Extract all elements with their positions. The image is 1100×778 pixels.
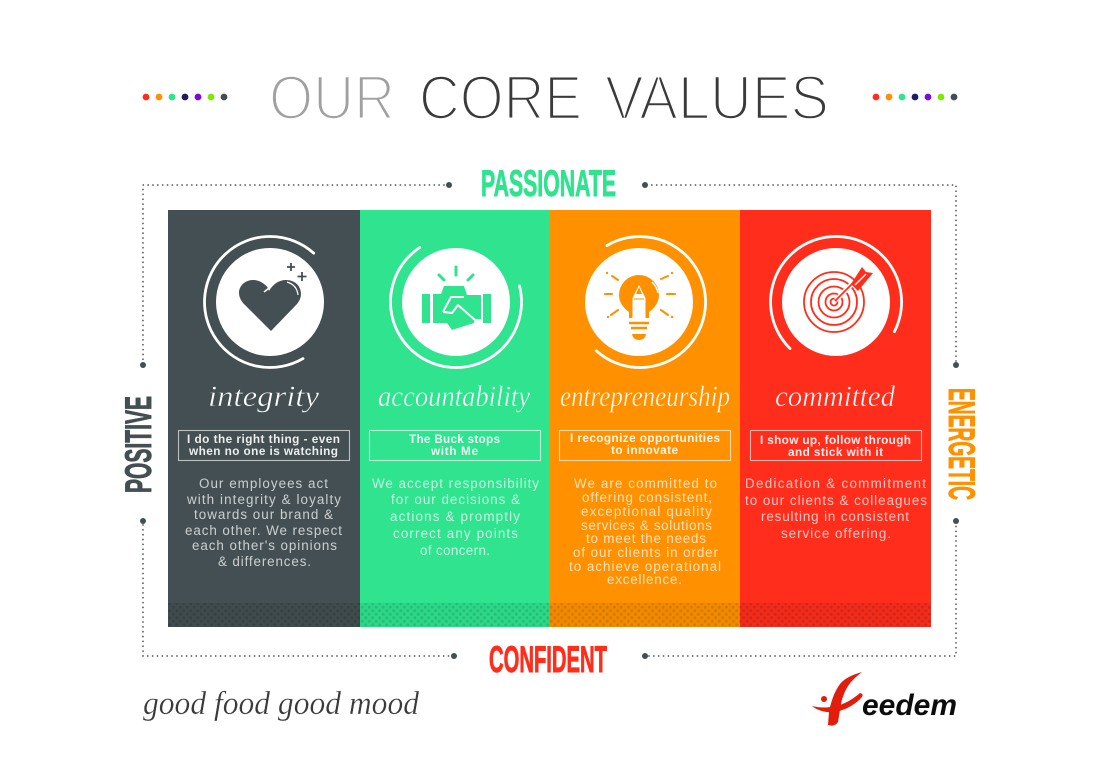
title: VALUES — [605, 64, 829, 133]
body text — [185, 476, 342, 569]
body text: resulting in consistent — [761, 509, 909, 524]
icon: light bulb — [585, 237, 706, 368]
body text: to our clients & colleagues — [745, 493, 927, 508]
logo: feedem — [812, 672, 957, 726]
body text: actions & promptly — [390, 509, 520, 524]
body text: Dedication & commitment — [745, 476, 926, 491]
icon: target — [771, 236, 902, 356]
body text: service offering. — [781, 526, 891, 541]
title: OUR — [269, 64, 395, 133]
body text: with integrity & loyalty — [186, 492, 341, 507]
tagline — [370, 430, 540, 460]
body text: services & solutions — [581, 518, 712, 533]
label: positive: POSITIVE — [118, 396, 159, 493]
tagline — [750, 430, 922, 460]
heading: integrity: integrity — [208, 380, 320, 413]
panel: accountability — [360, 210, 550, 627]
body text: Our employees act — [199, 476, 328, 491]
icon: heart — [205, 237, 324, 368]
tagline — [178, 430, 350, 460]
icon: handshake — [391, 248, 522, 368]
tagline: to innovate — [611, 443, 678, 457]
body text: & differences. — [218, 554, 311, 569]
body text: exceptional quality — [581, 504, 712, 519]
body text — [569, 476, 721, 587]
tagline: and stick with it — [788, 445, 883, 459]
body text: for our decisions & — [391, 492, 520, 507]
panel: entrepreneurship — [550, 210, 740, 627]
body text: correct any points — [393, 526, 518, 541]
body text: to meet the needs — [586, 531, 706, 546]
tagline: with Me — [430, 444, 478, 458]
body text: each other. We respect — [185, 523, 342, 538]
tagline: I do the right thing - even — [187, 432, 340, 446]
label: confident: CONFIDENT — [489, 639, 607, 680]
tagline: I show up, follow through — [760, 433, 911, 447]
tagline: I recognize opportunities — [570, 431, 720, 445]
tagline: The Buck stops — [409, 432, 500, 446]
heading: entrepreneurship: entrepreneurship — [560, 380, 730, 413]
body text: We are committed to — [574, 476, 717, 491]
body text: We accept responsibility — [372, 476, 539, 491]
colored dots right — [873, 94, 957, 100]
colored dots left — [143, 94, 227, 100]
logo: feedem: eedem — [862, 689, 957, 722]
panel: committed — [740, 210, 931, 627]
title: CORE — [419, 64, 582, 133]
body text: each other's opinions — [192, 538, 337, 553]
body text: excellence. — [607, 572, 682, 587]
body text: to achieve operational — [569, 559, 721, 574]
label: energetic: ENERGETIC — [941, 388, 982, 500]
title — [269, 64, 829, 133]
label: passionate: PASSIONATE — [481, 163, 616, 204]
body text: of our clients in order — [573, 545, 719, 560]
body text: of concern. — [420, 543, 490, 558]
tagline — [560, 430, 730, 460]
body text: offering consistent, — [582, 490, 712, 505]
body text — [745, 476, 927, 541]
panel: integrity — [168, 210, 360, 627]
heading: committed: committed — [775, 380, 896, 413]
heading: accountability: accountability — [378, 380, 531, 413]
body text: towards our brand & — [194, 507, 333, 522]
body text — [372, 476, 539, 558]
tagline: when no one is watching — [188, 444, 338, 458]
slogan: good food good mood — [143, 686, 419, 722]
